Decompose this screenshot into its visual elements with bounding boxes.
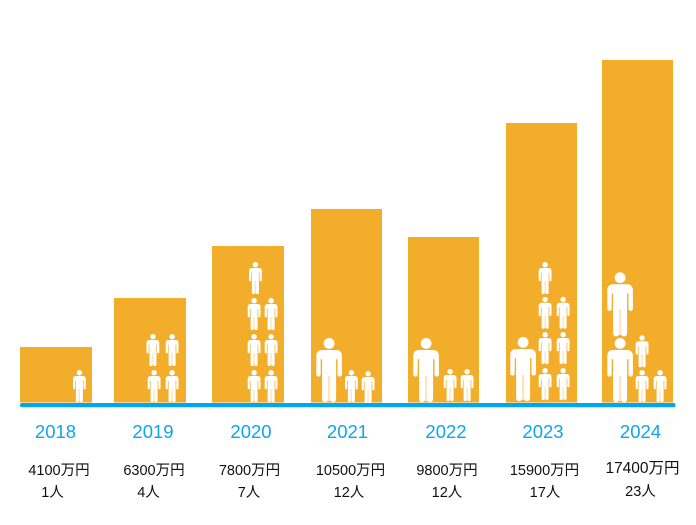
- bar 2024: [602, 60, 673, 402]
- bar 2018: [20, 347, 92, 402]
- headcount labels: 17人: [530, 485, 561, 501]
- headcount labels: 12人: [334, 485, 365, 501]
- year labels: 2021: [327, 421, 368, 442]
- amount labels: 4100万円: [28, 463, 90, 479]
- bar 2019: [114, 298, 186, 402]
- year labels: 2024: [620, 421, 661, 442]
- bar 2021: [311, 209, 382, 402]
- year labels: 2020: [230, 421, 272, 442]
- amount labels: 6300万円: [123, 463, 185, 479]
- amount labels: [28, 460, 680, 479]
- people icons 2019: [146, 334, 178, 402]
- bar 2023: [506, 123, 577, 402]
- amount labels: 7800万円: [219, 463, 280, 479]
- people icons 2018: [73, 370, 86, 402]
- year labels: 2022: [425, 421, 467, 442]
- year labels: 2023: [522, 421, 564, 442]
- people icons 2022: [413, 338, 474, 402]
- people icons 2024: [607, 272, 666, 402]
- bar 2022: [408, 237, 479, 402]
- bar 2020: [212, 246, 284, 402]
- year labels: 2018: [35, 421, 76, 442]
- people icons 2020: [248, 262, 278, 402]
- headcount labels: 4人: [137, 485, 160, 501]
- headcount labels: 7人: [238, 485, 261, 501]
- people icons 2023: [510, 262, 570, 401]
- amount labels: 9800万円: [416, 463, 478, 479]
- bars: [20, 60, 673, 402]
- axis line: [20, 403, 676, 407]
- headcount labels: [41, 484, 656, 501]
- headcount labels: 1人: [41, 485, 64, 501]
- amount labels: 17400万円: [605, 460, 680, 477]
- people icons 2021: [316, 338, 374, 403]
- amount labels: 10500万円: [316, 463, 385, 479]
- year labels: 2019: [132, 421, 174, 442]
- amount labels: 15900万円: [510, 463, 579, 479]
- headcount labels: 23人: [625, 484, 656, 500]
- headcount labels: 12人: [432, 485, 463, 501]
- year labels: [35, 421, 661, 442]
